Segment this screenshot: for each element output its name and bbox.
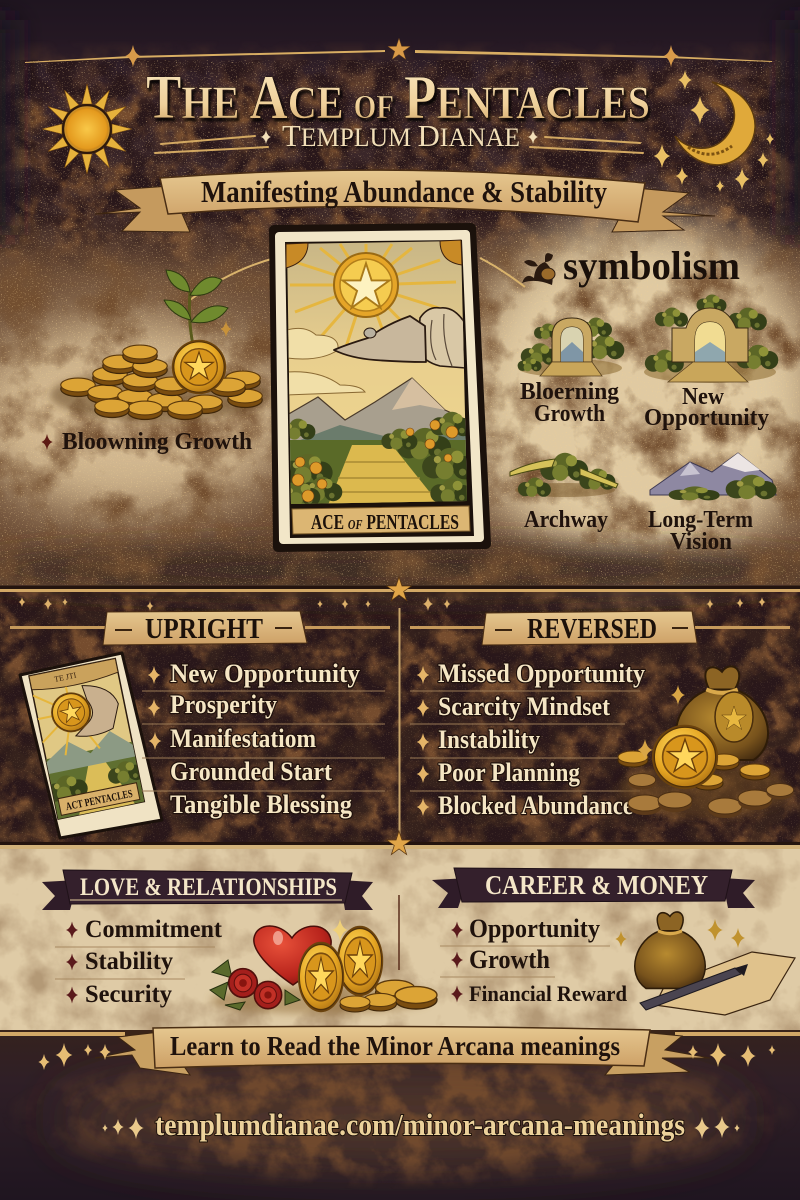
career list bbox=[440, 914, 627, 1006]
sparkles by the banner bbox=[38, 1043, 775, 1070]
symbol: archway foliage bbox=[510, 453, 618, 497]
career ribbon bbox=[432, 868, 755, 908]
career list: Financial Reward bbox=[469, 981, 627, 1006]
upright heading ribbon bbox=[10, 611, 390, 645]
upright list: New Opportunity bbox=[170, 659, 360, 688]
symbol: blooming growth arch bbox=[518, 318, 624, 377]
love ribbon bbox=[42, 870, 373, 910]
icon: branch bbox=[522, 253, 555, 285]
love list: Stability bbox=[85, 948, 173, 975]
love ribbon: LOVE & RELATIONSHIPS bbox=[80, 874, 337, 901]
label: long-term vision: Long-Term bbox=[648, 507, 753, 533]
reversed list: Poor Planning bbox=[438, 758, 580, 787]
hand bbox=[418, 308, 466, 368]
mountains bbox=[287, 378, 467, 470]
love list bbox=[55, 916, 223, 1008]
upright list: Prosperity bbox=[170, 690, 277, 719]
label: new opportunity bbox=[644, 384, 769, 431]
label: new opportunity: Opportunity bbox=[644, 405, 769, 431]
symbolism heading: symbolism bbox=[563, 243, 740, 288]
icon: crescent moon bbox=[654, 70, 774, 192]
label: bloerning growth bbox=[520, 379, 619, 427]
tarot card bbox=[274, 228, 486, 547]
career ribbon: CAREER & MONEY bbox=[485, 870, 708, 900]
panel: upright bbox=[10, 611, 390, 838]
career list: Growth bbox=[469, 945, 550, 974]
panel: love and relationships bbox=[42, 870, 437, 1014]
banner text: Learn to Read the Minor Arcana meanings bbox=[170, 1031, 620, 1061]
subtitle: TEMPLUM DIANAE bbox=[282, 118, 520, 153]
illustration: bag, scroll and pen bbox=[615, 912, 795, 1015]
footer url: templumdianae.com/minor-arcana-meanings bbox=[155, 1107, 685, 1142]
upright list bbox=[142, 659, 385, 819]
banner text: Manifesting Abundance & Stability bbox=[201, 174, 607, 209]
reversed heading ribbon bbox=[410, 611, 790, 645]
mini tarot card: TE JTI bbox=[53, 671, 77, 684]
top ornament line bbox=[25, 38, 772, 67]
trees and path bbox=[287, 440, 467, 505]
banner: learn to read bbox=[0, 1026, 800, 1075]
banner: manifesting abundance bbox=[95, 170, 715, 232]
symbol: long-term vision mountains bbox=[650, 453, 777, 500]
mini tarot card bbox=[20, 653, 162, 838]
reversed heading ribbon: REVERSED bbox=[527, 614, 657, 645]
label: long-term vision bbox=[648, 507, 753, 555]
reversed list: Instability bbox=[438, 725, 540, 754]
upright list: Grounded Start bbox=[170, 757, 332, 786]
icon: sun bbox=[42, 84, 132, 174]
mini tarot card: ACT PENTACLES bbox=[65, 788, 134, 813]
love list: Commitment bbox=[85, 916, 223, 943]
upright list: Tangible Blessing bbox=[170, 790, 352, 819]
illustration: bag and coins bbox=[618, 666, 794, 818]
career list: Opportunity bbox=[469, 914, 600, 943]
label: blooming growth: Bloowning Growth bbox=[62, 429, 252, 455]
subtitle ornaments bbox=[155, 130, 643, 153]
illustration: coins and sprout bbox=[50, 270, 270, 421]
symbol: new opportunity arch bbox=[644, 294, 778, 383]
label: archway: Archway bbox=[524, 507, 608, 533]
card art bbox=[287, 241, 467, 504]
title: THE ACE OF PENTACLES bbox=[146, 64, 650, 132]
panel: career and money bbox=[432, 868, 795, 1015]
arc lines behind the card bbox=[190, 258, 525, 300]
reversed list: Scarcity Mindset bbox=[438, 692, 610, 721]
love list: Security bbox=[85, 981, 172, 1008]
label: bloerning growth: Growth bbox=[534, 401, 605, 427]
label: new opportunity: New bbox=[682, 384, 725, 410]
reversed list: Blocked Abundance bbox=[438, 791, 633, 820]
section divider with star bbox=[0, 577, 800, 854]
card label: ACE OF PENTACLES bbox=[311, 510, 459, 534]
reversed list: Missed Opportunity bbox=[438, 659, 645, 688]
panel: reversed bbox=[410, 611, 794, 820]
upright heading ribbon: UPRIGHT bbox=[145, 614, 263, 645]
illustration: heart, roses and coins bbox=[210, 919, 437, 1014]
reversed list bbox=[410, 659, 645, 820]
center divider lower bbox=[398, 895, 400, 970]
label: long-term vision: Vision bbox=[670, 529, 732, 555]
label: bloerning growth: Bloerning bbox=[520, 379, 619, 405]
upright list: Manifestatiom bbox=[170, 724, 316, 753]
